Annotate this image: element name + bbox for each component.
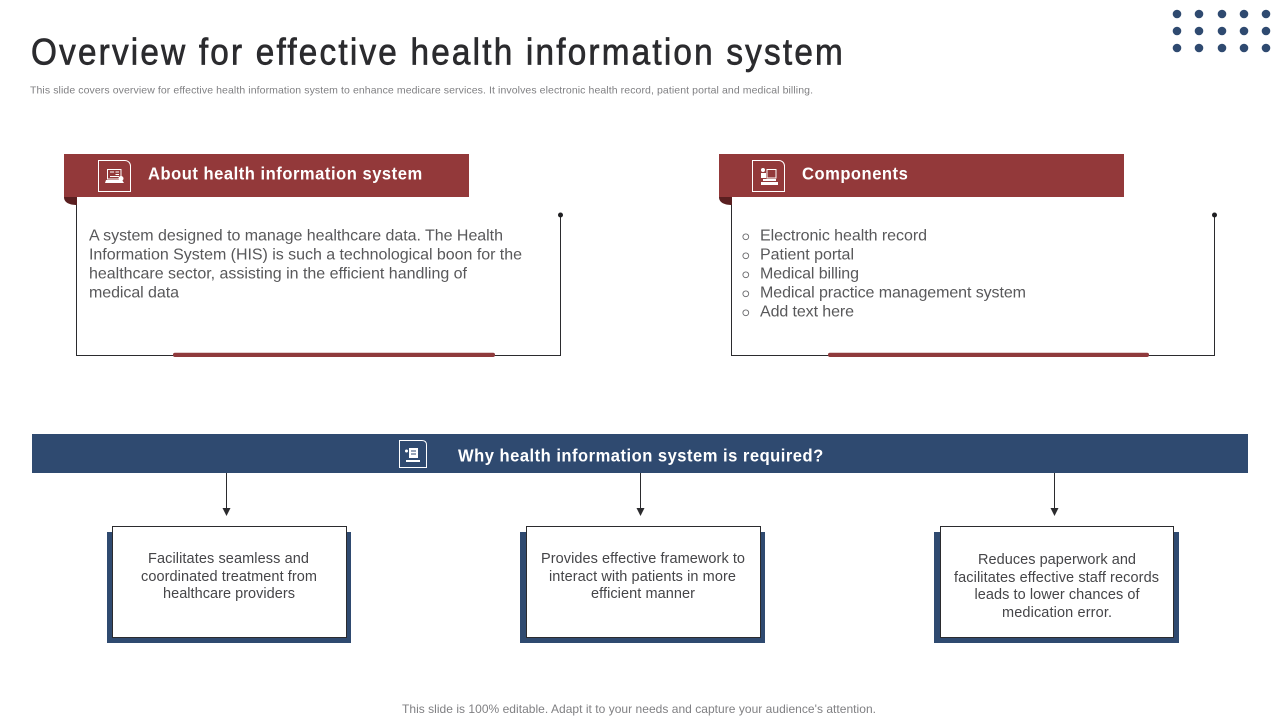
about body text: healthcare sector, assisting in the efficient handling of (89, 266, 468, 282)
card 3 text: medication error. (1002, 605, 1112, 621)
card 1 (107, 526, 351, 643)
card 3 text: leads to lower chances of (974, 587, 1140, 603)
title: Overview for effective health information system (31, 32, 843, 73)
about banner (64, 154, 469, 197)
components list: Electronic health record (760, 228, 927, 244)
card 3 face (940, 526, 1174, 638)
arrow 1 (222, 473, 230, 516)
panel: components (719, 154, 1217, 357)
icon: document (400, 440, 426, 468)
about body text: Information System (HIS) is such a technological boon for the (89, 246, 522, 264)
card 2 text: interact with patients in more (549, 569, 736, 585)
components banner fold (719, 197, 732, 205)
components panel bottom accent (828, 353, 1149, 357)
subtitle: This slide covers overview for effective health information system to enhance medicare services. It involves electronic health record, patient portal and medical billing. (30, 84, 813, 96)
components list: Medical practice management system (760, 284, 1026, 302)
card 1 text (141, 551, 317, 602)
card 1 text: Facilitates seamless and (148, 551, 309, 567)
card 2 text (541, 551, 745, 602)
panel: about health information system (64, 154, 563, 357)
about heading: About health information system (148, 163, 422, 184)
why heading: Why health information system is required? (458, 445, 823, 466)
card 2 face (526, 526, 760, 638)
about body text (89, 228, 522, 302)
about body text: medical data (89, 284, 179, 302)
card 3 backing (934, 532, 1179, 643)
icon: medical workstation (752, 160, 784, 192)
card 1 text: coordinated treatment from (141, 569, 317, 585)
card 2 backing (520, 532, 765, 643)
about body text: A system designed to manage healthcare data. The Health (89, 228, 503, 244)
about panel bottom accent (173, 353, 495, 357)
components panel frame dot (1212, 212, 1217, 218)
card 3 text: Reduces paperwork and (978, 552, 1136, 568)
about panel frame (76, 197, 560, 356)
arrow 2 (636, 473, 644, 516)
decorative dot grid (1173, 10, 1270, 52)
components list: Medical billing (760, 266, 859, 282)
card 3 text (954, 552, 1159, 621)
icon: laptop with record (98, 160, 130, 192)
card 2 text: Provides effective framework to (541, 551, 745, 567)
card 1 text: healthcare providers (163, 586, 295, 602)
why banner bar (32, 434, 1248, 473)
card 2 (520, 526, 765, 643)
about panel frame dot (558, 212, 563, 218)
list bullets (743, 234, 749, 316)
components banner (719, 154, 1124, 197)
panel: why required banner (32, 434, 1248, 473)
about banner fold (64, 197, 77, 205)
components heading: Components (802, 163, 908, 184)
card 1 face (112, 526, 346, 638)
components list (743, 228, 1026, 320)
arrow 3 (1050, 473, 1058, 516)
components list: Add text here (760, 304, 854, 320)
footer note: This slide is 100% editable. Adapt it to your needs and capture your audience's attention. (402, 702, 876, 716)
card 2 text: efficient manner (591, 586, 695, 602)
card 3 (934, 526, 1179, 643)
card 1 backing (107, 532, 351, 643)
card 3 text: facilitates effective staff records (954, 570, 1159, 586)
components panel frame (732, 197, 1214, 356)
components list: Patient portal (760, 246, 854, 264)
